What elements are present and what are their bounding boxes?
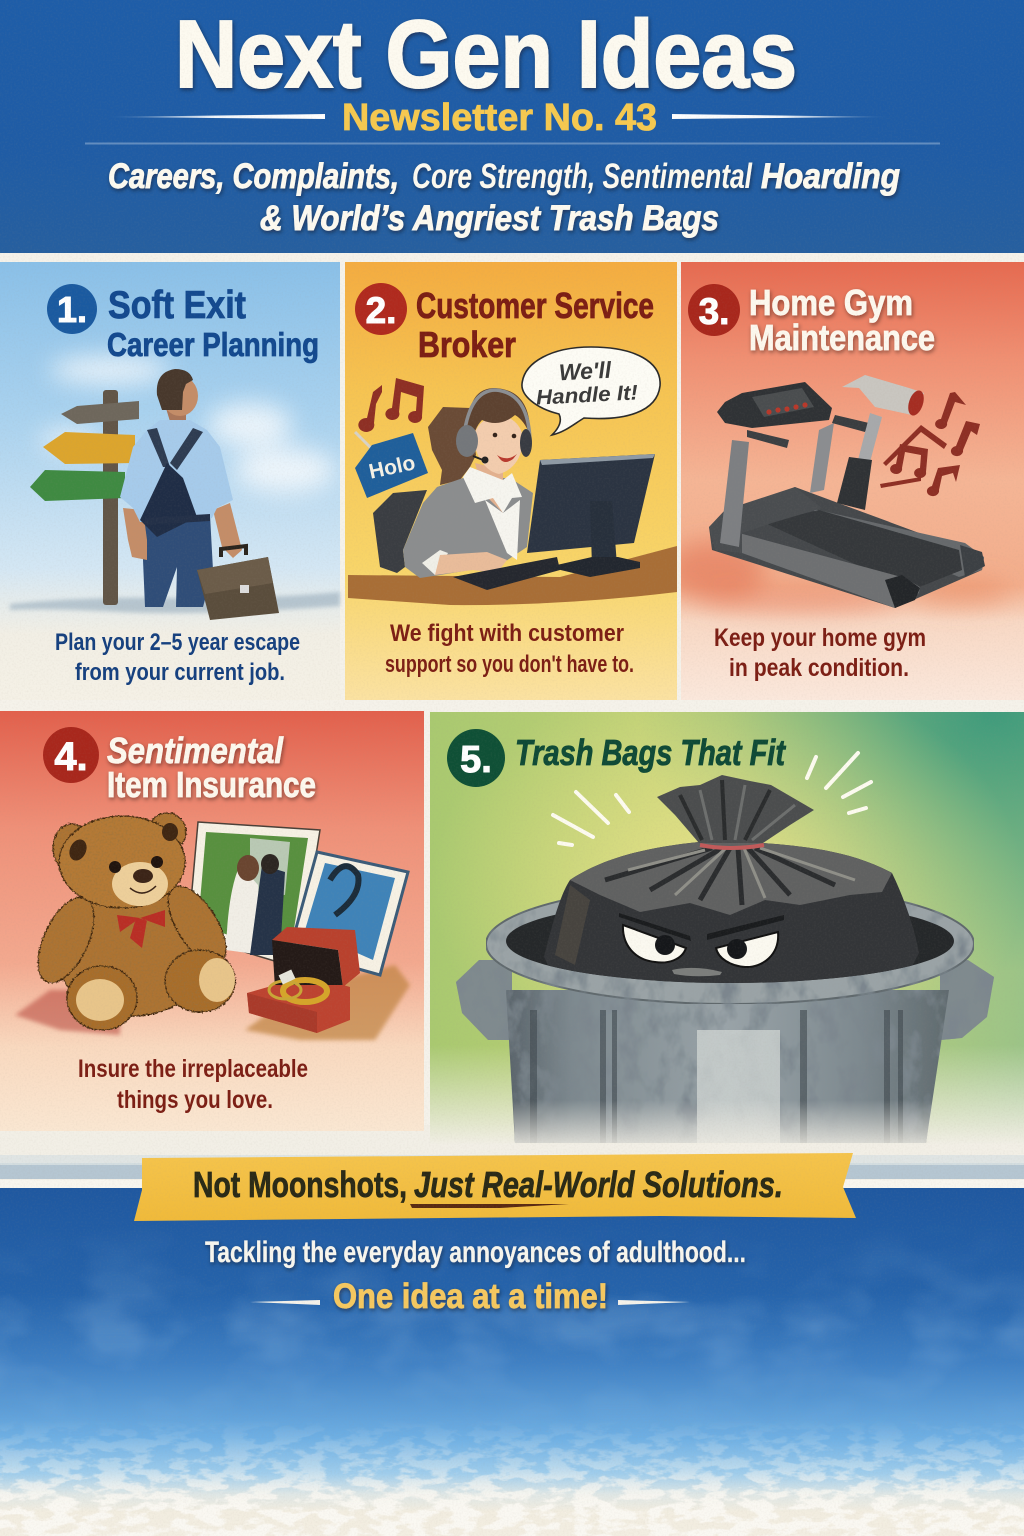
panel 3: home gym maintenance bbox=[665, 262, 1024, 700]
icon: trash can bbox=[456, 884, 994, 1143]
panel 2 description: We fight with customer bbox=[390, 620, 624, 647]
footer transition strip bbox=[0, 1125, 1024, 1188]
icon: music notes and roof bbox=[880, 392, 980, 496]
icon: briefcase bbox=[197, 546, 279, 620]
icon: man with backpack bbox=[120, 369, 242, 607]
footer tagline: Tackling the everyday annoyances of adulthood... bbox=[205, 1236, 746, 1269]
panel 1 description bbox=[55, 629, 300, 686]
subtitle: & World’s Angriest Trash Bags bbox=[260, 199, 719, 238]
step number 3 bbox=[688, 284, 740, 336]
panel 4 heading bbox=[107, 730, 316, 805]
icon: call center agent bbox=[373, 388, 533, 578]
panel 3 heading bbox=[749, 282, 935, 358]
panel 2 description: support so you don't have to. bbox=[385, 651, 634, 678]
speech bubble: We'll bbox=[558, 357, 612, 385]
warm wash bbox=[665, 540, 1010, 612]
panel 3 heading: Maintenance bbox=[749, 317, 935, 358]
panel 2: customer service broker bbox=[345, 262, 677, 700]
subtitle: Core Strength, Sentimental bbox=[412, 157, 753, 196]
icon: ring box bbox=[247, 927, 360, 1033]
panel 1 description: from your current job. bbox=[75, 659, 285, 686]
panel 3 heading: Home Gym bbox=[749, 282, 913, 323]
title: Next Gen Ideas bbox=[175, 1, 797, 108]
panel 5: trash bags that fit bbox=[430, 712, 1024, 1145]
icon: angry trash bag bbox=[544, 775, 919, 990]
panel 4 heading: Item Insurance bbox=[107, 764, 316, 805]
slogan banner bbox=[134, 1153, 856, 1221]
panel 1 description: Plan your 2–5 year escape bbox=[55, 629, 300, 656]
slogan banner: Just Real-World Solutions. bbox=[414, 1164, 783, 1205]
ground mist bbox=[10, 592, 340, 613]
panel 2 heading: Broker bbox=[418, 324, 516, 365]
panel 2 heading bbox=[416, 285, 654, 365]
panel 1 heading: Soft Exit bbox=[108, 284, 246, 327]
desk bbox=[348, 546, 677, 605]
step number 1: 1. bbox=[57, 289, 87, 330]
panel 5 heading: Trash Bags That Fit bbox=[515, 732, 787, 773]
photo: blue card bbox=[290, 852, 408, 975]
speech bubble bbox=[522, 347, 660, 435]
subtitle: Hoarding bbox=[761, 157, 900, 196]
panel 3 description: Keep your home gym bbox=[714, 624, 926, 652]
newsletter label with rules: Newsletter No. 43 bbox=[342, 97, 657, 139]
panel 1 heading bbox=[107, 284, 319, 363]
angry eyes bbox=[619, 913, 784, 976]
subtitle: Careers, Complaints, bbox=[108, 157, 399, 196]
panel 3 description: in peak condition. bbox=[729, 654, 909, 682]
step number 2: 2. bbox=[366, 290, 396, 331]
step number 5: 5. bbox=[460, 739, 492, 781]
slogan banner: Not Moonshots, bbox=[193, 1164, 407, 1205]
step number 3: 3. bbox=[699, 291, 729, 332]
photo: couple bbox=[188, 822, 320, 968]
subtitle bbox=[108, 157, 900, 238]
panel 1 heading: Career Planning bbox=[107, 326, 319, 363]
header band bbox=[0, 0, 1024, 253]
panel 4 description: Insure the irreplaceable bbox=[78, 1055, 308, 1083]
closing call-out: One idea at a time! bbox=[333, 1277, 608, 1316]
panel 4 heading: Sentimental bbox=[107, 730, 284, 771]
panel 3 description bbox=[714, 624, 926, 682]
stains bbox=[15, 990, 120, 1035]
newsletter label with rules bbox=[105, 97, 892, 139]
icon: treadmill bbox=[709, 382, 985, 608]
icon: hold sign bbox=[355, 432, 428, 498]
panel 1: soft exit career planning bbox=[0, 262, 340, 700]
step number 1 bbox=[47, 284, 97, 334]
icon: hold sign: Holo bbox=[367, 451, 417, 484]
speech bubble: Handle It! bbox=[535, 381, 639, 410]
step number 4: 4. bbox=[54, 735, 88, 779]
icon: signpost bbox=[30, 390, 139, 605]
step number 2 bbox=[355, 283, 407, 335]
footer watercolor band bbox=[0, 1188, 1024, 1536]
icon: burst lines bbox=[553, 753, 871, 845]
icon: desktop monitor bbox=[527, 454, 655, 577]
panel 4: sentimental item insurance bbox=[0, 711, 424, 1131]
clouds bbox=[40, 356, 335, 492]
icon: keyboard bbox=[453, 557, 560, 590]
panel 4 description bbox=[78, 1055, 308, 1114]
icon: music notes bbox=[358, 378, 424, 432]
panel 2 description bbox=[385, 620, 634, 678]
icon: teddy bear bbox=[27, 813, 237, 1030]
panel 4 description: things you love. bbox=[117, 1086, 273, 1114]
step number 4 bbox=[43, 727, 99, 783]
step number 5 bbox=[447, 729, 505, 787]
icon: hammer bbox=[837, 375, 927, 510]
panel 2 heading: Customer Service bbox=[416, 285, 654, 326]
